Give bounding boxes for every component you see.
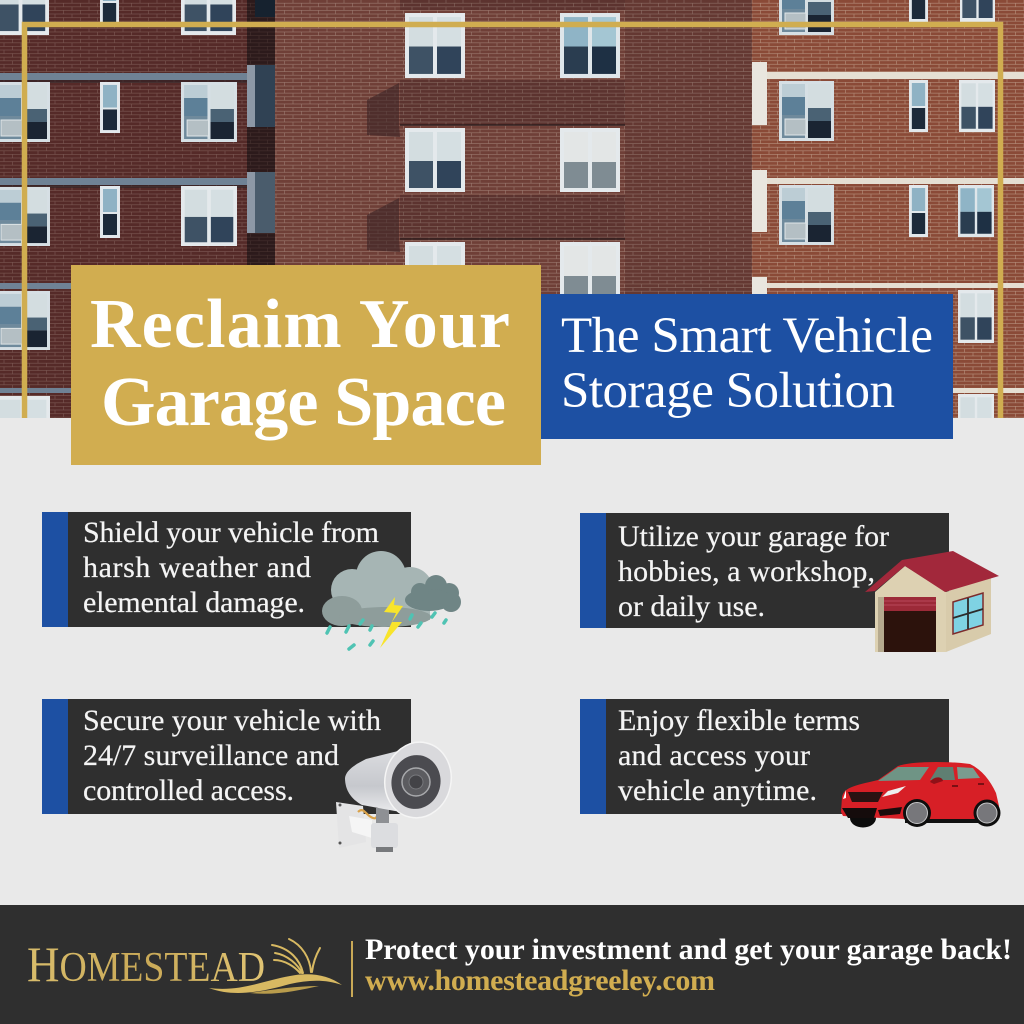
panel: weather protection xyxy=(42,512,411,627)
lightning bolt xyxy=(380,597,403,648)
title block: Garage Space xyxy=(101,364,506,441)
footer bar xyxy=(0,905,1024,1024)
lower page panel xyxy=(0,418,1024,905)
panel: security: 24/7 surveillance and xyxy=(83,739,339,772)
panel: garage use: hobbies, a workshop, xyxy=(618,555,875,588)
title block xyxy=(71,265,541,465)
panel: flexible terms xyxy=(580,699,949,814)
panel: flexible terms: and access your xyxy=(618,739,810,772)
divider xyxy=(351,941,353,997)
title block: Reclaim Your xyxy=(90,286,510,363)
panel: weather protection: elemental damage. xyxy=(83,586,305,619)
panel: security: controlled access. xyxy=(83,774,294,807)
panel: weather protection: harsh weather and xyxy=(83,551,311,584)
middle building xyxy=(275,0,752,418)
panel: garage use xyxy=(580,513,949,628)
gold frame xyxy=(24,24,1000,418)
icon: security camera xyxy=(336,736,458,852)
panel: garage use: Utilize your garage for xyxy=(618,520,889,553)
icon: house with garage xyxy=(865,551,999,652)
left building xyxy=(0,0,275,456)
photo: brick apartment buildings xyxy=(0,0,1024,456)
panel: flexible terms: Enjoy flexible terms xyxy=(618,704,860,737)
subtitle block: The Smart Vehicle xyxy=(561,308,933,364)
panel: garage use: or daily use. xyxy=(618,590,765,623)
panel: flexible terms: vehicle anytime. xyxy=(618,774,817,807)
subtitle block xyxy=(541,294,953,439)
footer website: www.homesteadgreeley.com xyxy=(365,964,715,997)
icon: red car xyxy=(841,762,1000,828)
subtitle block: Storage Solution xyxy=(561,363,895,419)
logo: Homestead: HOMESTEAD xyxy=(27,936,265,992)
icon: storm cloud xyxy=(322,551,461,649)
panel: weather protection: Shield your vehicle from xyxy=(83,516,379,549)
right building xyxy=(752,0,1024,447)
rain drops xyxy=(327,613,446,649)
panel: security: Secure your vehicle with xyxy=(83,704,381,737)
footer call to action: Protect your investment and get your garage back! xyxy=(365,933,1012,966)
panel: security xyxy=(42,699,411,814)
